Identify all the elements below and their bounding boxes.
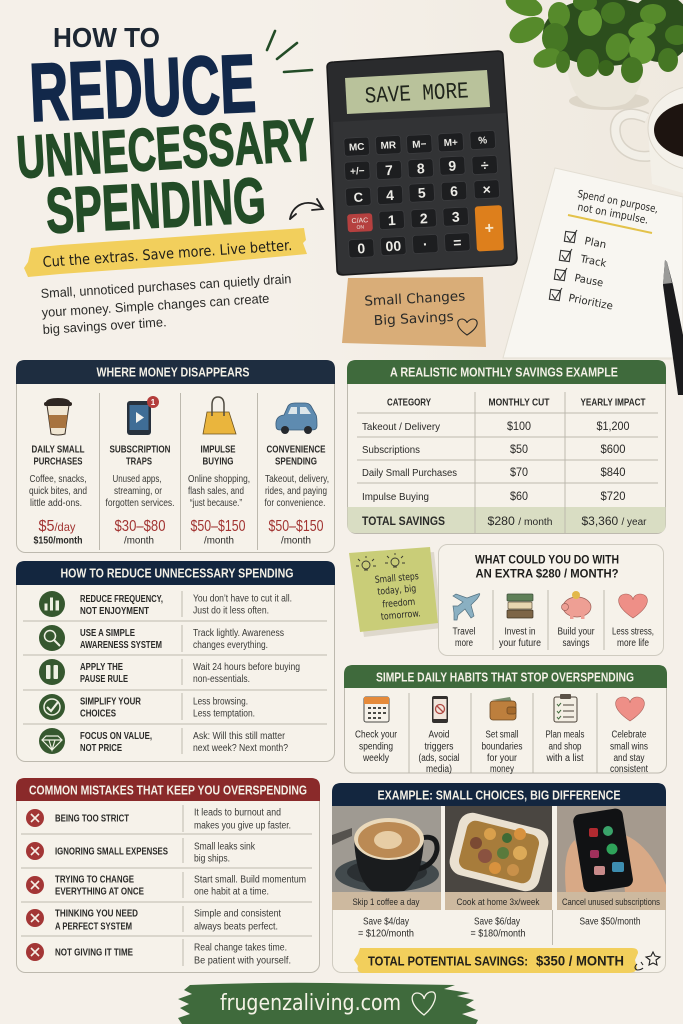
savings figures: = $120/month (358, 928, 414, 940)
row: being too strict (26, 808, 291, 832)
row: reduce frequency: NOT ENJOYMENT (80, 606, 149, 617)
savings figures (358, 916, 640, 940)
row: pause rule (39, 659, 300, 685)
tagline banner (24, 228, 307, 277)
intro text: big savings over time. (42, 314, 167, 337)
panel: realistic monthly savings table: $1,200 (596, 419, 630, 433)
total savings banner (354, 948, 638, 973)
row: trying to change everything: EVERYTHING AT ONCE (55, 886, 144, 898)
calculator keys: 1 (387, 212, 396, 228)
row: pause rule: non-essentials. (193, 674, 250, 685)
panel: realistic monthly savings table: MONTHLY CUT (488, 398, 550, 408)
column: subscription traps: Unused apps, (112, 474, 162, 485)
panel: simple daily habits (344, 665, 667, 775)
column: convenience spending: Takeout, delivery, (265, 474, 329, 485)
row: perfect system (26, 908, 281, 932)
row: reduce frequency: REDUCE FREQUENCY, (80, 594, 163, 605)
photo captions: Cook at home 3x/week (456, 897, 540, 908)
habit: plan meals: and shop (548, 742, 582, 752)
row: ignoring small expenses (26, 842, 256, 864)
notepad: Pause (573, 272, 604, 289)
calculator keys: 4 (386, 187, 395, 203)
column: subscription traps: forgotten services. (106, 498, 174, 509)
savings figures: Save $50/month (580, 916, 640, 928)
column: convenience spending (264, 403, 329, 546)
habit: plan meals (546, 694, 584, 764)
panel header (332, 783, 666, 806)
row: trying to change everything: TRYING TO CHANGE (55, 874, 134, 886)
photo: coffee (332, 806, 441, 892)
panel: realistic monthly savings table: $600 (600, 442, 626, 456)
item: savings piggy bank (558, 591, 595, 649)
column: impulse buying: $50–$150 (190, 518, 246, 535)
panel: realistic monthly savings table: $70 (510, 465, 528, 479)
photo captions: Skip 1 coffee a day (352, 897, 420, 908)
habit: avoid triggers (418, 696, 460, 775)
habit: set boundaries: boundaries (482, 742, 522, 752)
calculator keys: M+ (443, 137, 458, 149)
row: pause rule: APPLY THE (80, 662, 123, 673)
row: focus on value: NOT PRICE (80, 743, 122, 754)
row: focus on value: next week? Next month? (193, 743, 288, 754)
habit: check spending: weekly (362, 753, 389, 764)
item: less stress heart: Less stress, (612, 626, 654, 638)
habit: plan meals: with a list (546, 753, 584, 764)
column: convenience spending: CONVENIENCE (266, 444, 326, 456)
sticky note: small steps: freedom (382, 597, 416, 610)
calculator keys: % (478, 135, 488, 147)
row: trying to change everything: one habit at a time. (194, 886, 269, 898)
kraft sticky note: Big Savings (373, 309, 454, 329)
habit: check spending: spending (359, 742, 393, 752)
row: perfect system: A PERFECT SYSTEM (55, 922, 132, 932)
row: awareness system: AWARENESS SYSTEM (80, 640, 162, 651)
column: daily small purchases (29, 398, 87, 546)
column: impulse buying: “just because.” (190, 498, 242, 509)
panel: realistic monthly savings table: Daily Small Purchases (362, 467, 457, 479)
calculator keys: 7 (385, 162, 394, 178)
row: not giving it time: Real change takes time. (194, 942, 287, 954)
calculator keys (344, 130, 504, 258)
row: ignoring small expenses: IGNORING SMALL EXPENSES (55, 846, 168, 858)
habit: set boundaries: for your (487, 753, 518, 764)
habit: celebrate wins: and stay (614, 753, 644, 764)
calculator keys: MR (380, 140, 397, 152)
total row: $280 / month (488, 514, 552, 528)
hero title: SPENDING (44, 164, 267, 247)
column: daily small purchases: Coffee, snacks, (30, 474, 86, 485)
row: being too strict: It leads to burnout and (194, 808, 281, 818)
panel: realistic monthly savings table: Takeout / Delivery (362, 421, 441, 433)
habit: check spending (355, 697, 398, 764)
row: perfect system: always beats perfect. (194, 922, 278, 932)
calculator keys: 5 (417, 184, 426, 201)
row: reduce frequency (39, 591, 292, 617)
calculator keys: · (423, 236, 428, 252)
item: less stress heart (612, 594, 654, 649)
item: less stress heart: more life (617, 638, 649, 649)
row: simplify choices: SIMPLIFY YOUR (80, 696, 142, 708)
savings figures: Save $6/day (474, 916, 520, 928)
hero title: UNNECESSARY (15, 106, 317, 191)
panel header (16, 778, 320, 801)
total savings banner: TOTAL POTENTIAL SAVINGS: (368, 954, 528, 968)
column: convenience spending: $50–$150 (268, 518, 324, 535)
panel: how to reduce unnecessary spending (16, 561, 335, 762)
habit: check spending: Check your (355, 730, 398, 740)
habit: plan meals: Plan meals (546, 730, 584, 740)
panel header: COMMON MISTAKES THAT KEEP YOU OVERSPENDING (29, 782, 307, 798)
panel: what could you do with an extra $280: WHAT COULD YOU DO WITH (475, 552, 619, 566)
column: impulse buying: IMPULSE (200, 444, 236, 456)
row: trying to change everything: Start small. Build momentum (194, 874, 306, 886)
calculator keys: 3 (451, 208, 460, 225)
photo: phone with subscriptions (557, 806, 666, 893)
row: being too strict: makes you give up faster. (194, 820, 291, 832)
panel header (16, 360, 335, 384)
sticky note: small steps: tomorrow. (380, 608, 421, 623)
item: invest: your future (499, 638, 541, 649)
calculator keys: = (453, 234, 462, 251)
item: invest (499, 594, 541, 649)
calculator display (345, 70, 490, 114)
panel: realistic monthly savings table: $720 (600, 489, 626, 503)
panel: realistic monthly savings table: Impulse Buying (362, 491, 429, 503)
plant in pot (503, 0, 683, 110)
kraft sticky note (342, 277, 486, 347)
row: pause rule: Wait 24 hours before buying (193, 662, 300, 673)
panel: realistic monthly savings table: YEARLY IMPACT (580, 398, 646, 408)
intro text (40, 271, 292, 337)
total row: $3,360 / year (582, 514, 647, 528)
notepad: not on impulse. (576, 201, 649, 227)
column: daily small purchases: $5/day (38, 518, 76, 535)
habit: avoid triggers: media) (426, 764, 452, 775)
row: reduce frequency: Just do it less often. (193, 606, 269, 616)
calculator keys: 2 (419, 210, 428, 226)
footer website banner (178, 983, 478, 1024)
tagline banner: Cut the extras. Save more. Live better. (42, 238, 293, 271)
intro text: Small, unnoticed purchases can quietly drain (40, 271, 292, 301)
total savings banner: $350 / MONTH (536, 954, 624, 968)
row: not giving it time (26, 942, 291, 966)
panel: realistic monthly savings table: $840 (600, 465, 626, 479)
panel: realistic monthly savings table: Subscriptions (362, 444, 420, 456)
column: convenience spending: SPENDING (275, 456, 317, 468)
hero title: REDUCE (28, 38, 258, 139)
panel: realistic monthly savings table: CATEGORY (387, 398, 431, 408)
sticky note: small steps: today, big (377, 583, 417, 598)
calculator keys: 00 (385, 238, 402, 254)
calculator keys: C (353, 189, 364, 205)
item: travel: Travel (452, 626, 476, 638)
calculator keys: ON (356, 224, 365, 231)
sticky note: small steps (349, 547, 442, 637)
column: subscription traps: $30–$80 (114, 518, 166, 535)
row: ignoring small expenses: big ships. (194, 854, 230, 864)
photo: home-cooked meal (445, 806, 552, 894)
panel header: WHERE MONEY DISAPPEARS (96, 364, 250, 380)
panel: what could you do with an extra $280 (438, 544, 664, 656)
column: daily small purchases: $150/month (34, 536, 82, 546)
column: subscription traps: 1 (151, 398, 156, 407)
habit: avoid triggers: triggers (424, 742, 454, 752)
hero title (15, 22, 317, 247)
column: convenience spending: for convenience. (264, 498, 326, 509)
calculator keys: 0 (357, 240, 366, 256)
pen (663, 260, 683, 395)
habit: avoid triggers: Avoid (428, 730, 450, 740)
calculator (327, 51, 517, 275)
notepad: Prioritize (567, 292, 614, 313)
panel: realistic monthly savings table (347, 360, 666, 534)
panel header (16, 561, 335, 585)
habit: celebrate wins: consistent (610, 764, 648, 775)
column: subscription traps: /month (124, 536, 154, 546)
footer website banner: frugenzaliving.com (220, 991, 401, 1016)
notepad (503, 168, 683, 358)
item: invest: Invest in (504, 626, 536, 638)
habit: set boundaries: money (490, 764, 514, 775)
row: pause rule: PAUSE RULE (80, 674, 128, 685)
calculator keys: +/− (350, 166, 365, 178)
habit: avoid triggers: (ads, social (418, 753, 460, 764)
row: not giving it time: Be patient with yourself. (194, 956, 291, 966)
column: impulse buying: BUYING (202, 456, 234, 468)
notepad: Track (578, 253, 608, 270)
row: focus on value (39, 728, 288, 754)
photo captions: Cancel unused subscriptions (562, 897, 660, 908)
habit: set boundaries: Set small (486, 730, 518, 740)
column: convenience spending: rides, and paying (265, 486, 327, 497)
panel header: EXAMPLE: SMALL CHOICES, BIG DIFFERENCE (378, 788, 621, 802)
column: daily small purchases: PURCHASES (34, 456, 83, 468)
coffee cup (615, 86, 683, 193)
total row (362, 514, 647, 528)
panel: what could you do with an extra $280: AN EXTRA $280 / MONTH? (476, 566, 618, 580)
calculator keys: 6 (450, 183, 459, 199)
panel: where money disappears (16, 360, 335, 552)
column: daily small purchases: little add-ons. (30, 498, 82, 509)
calculator keys: 9 (448, 157, 457, 174)
calculator keys: M− (412, 139, 427, 151)
row: awareness system: changes everything. (193, 640, 268, 651)
row: awareness system (39, 625, 284, 651)
panel header (344, 665, 667, 688)
column: impulse buying (188, 397, 250, 546)
column: subscription traps (106, 396, 174, 546)
notepad: Plan (583, 235, 607, 251)
row: awareness system: USE A SIMPLE (80, 628, 135, 639)
photo captions (332, 892, 666, 910)
panel: realistic monthly savings table: $50 (510, 442, 528, 456)
calculator keys: + (484, 220, 494, 238)
calculator display: SAVE MORE (364, 78, 469, 110)
calculator keys: 8 (416, 160, 425, 176)
total row: TOTAL SAVINGS (362, 514, 445, 528)
panel: realistic monthly savings table: $60 (510, 489, 528, 503)
sticky note: small steps: Small steps (374, 571, 419, 586)
column: subscription traps: TRAPS (126, 456, 152, 468)
row: perfect system: Simple and consistent (194, 908, 281, 920)
habit: celebrate wins (610, 697, 648, 775)
item: savings piggy bank: Build your (558, 626, 595, 638)
row: being too strict: BEING TOO STRICT (55, 814, 129, 824)
row: simplify choices (39, 694, 255, 720)
panel: common mistakes (16, 778, 320, 972)
row: reduce frequency: You don’t have to cut it all. (193, 594, 292, 604)
item: travel (452, 594, 480, 649)
panel header: HOW TO REDUCE UNNECESSARY SPENDING (60, 566, 294, 580)
panel: small choices, big difference (332, 783, 666, 973)
column: impulse buying: flash sales, and (188, 486, 244, 497)
column: impulse buying: Online shopping, (188, 474, 250, 485)
habit: set boundaries (482, 697, 522, 775)
notepad: Spend on purpose, (576, 188, 659, 216)
row: simplify choices: CHOICES (80, 708, 116, 720)
column: impulse buying: /month (204, 536, 234, 546)
row: perfect system: THINKING YOU NEED (55, 908, 138, 920)
row: focus on value: Ask: Will this still matter (193, 731, 286, 742)
curved arrow to calculator (290, 199, 323, 219)
column: convenience spending: /month (281, 536, 311, 546)
column: subscription traps: SUBSCRIPTION (110, 444, 170, 456)
row: trying to change everything (26, 874, 306, 898)
calculator keys: C/AC (351, 217, 368, 225)
habit: celebrate wins: small wins (610, 742, 648, 752)
calculator keys: MC (349, 142, 365, 154)
row: not giving it time: NOT GIVING IT TIME (55, 948, 133, 958)
row: simplify choices: Less browsing. (193, 696, 248, 708)
intro text: your money. Simple changes can create (41, 291, 270, 320)
row: ignoring small expenses: Small leaks sink (194, 842, 256, 852)
row: simplify choices: Less temptation. (193, 708, 255, 720)
calculator keys: ÷ (480, 157, 489, 173)
item: savings piggy bank: savings (562, 638, 590, 649)
panel: realistic monthly savings table: $100 (507, 419, 531, 433)
column: daily small purchases: DAILY SMALL (32, 444, 84, 456)
star doodle (635, 952, 660, 970)
item: travel: more (455, 638, 473, 649)
panel header: A REALISTIC MONTHLY SAVINGS EXAMPLE (390, 364, 618, 380)
panel header (347, 360, 666, 384)
row: focus on value: FOCUS ON VALUE, (80, 731, 152, 742)
column: subscription traps: streaming, or (114, 486, 163, 497)
calculator keys: × (482, 181, 491, 198)
savings figures: Save $4/day (363, 916, 409, 928)
kraft sticky note: Small Changes (364, 288, 466, 310)
savings figures: = $180/month (470, 928, 526, 940)
accent sparks (267, 31, 312, 72)
habit: celebrate wins: Celebrate (612, 730, 647, 740)
hero title: HOW TO (53, 22, 160, 53)
row: awareness system: Track lightly. Awareness (193, 628, 284, 639)
column: daily small purchases: quick bites, and (29, 486, 87, 497)
